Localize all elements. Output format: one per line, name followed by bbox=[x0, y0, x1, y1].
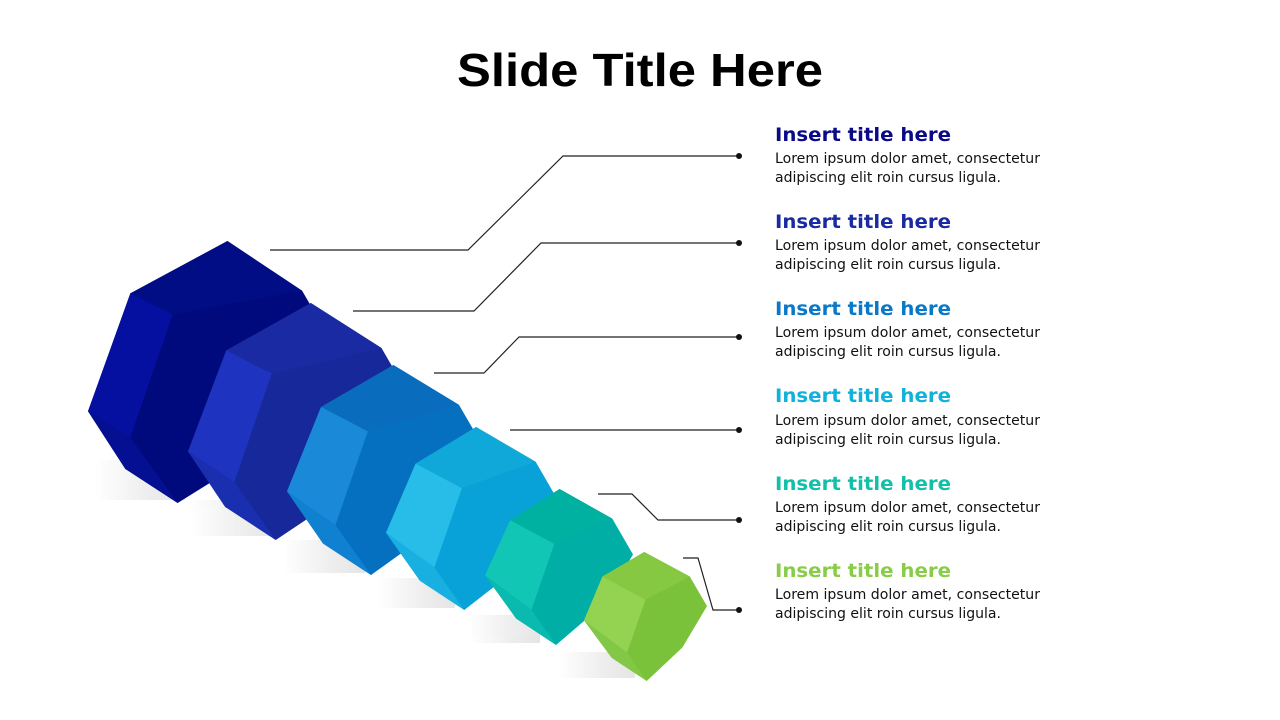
connector lines bbox=[270, 156, 739, 610]
text block 3: Insert title here bbox=[775, 298, 951, 320]
text block 4: Insert title here bbox=[775, 385, 951, 407]
text block 2: adipiscing elit roin cursus ligula. bbox=[775, 257, 1001, 273]
text block 6 bbox=[775, 560, 1040, 622]
title: Slide Title Here bbox=[457, 44, 823, 96]
hexagon prism 5 bbox=[485, 489, 633, 645]
text block 2: Insert title here bbox=[775, 211, 951, 233]
text block 5: adipiscing elit roin cursus ligula. bbox=[775, 519, 1001, 535]
text block 1: Lorem ipsum dolor amet, consectetur bbox=[775, 151, 1040, 167]
text block 1 bbox=[775, 124, 1040, 186]
hexagon prism 2 bbox=[188, 303, 413, 540]
text block 6: Lorem ipsum dolor amet, consectetur bbox=[775, 587, 1040, 603]
text block 2 bbox=[775, 211, 1040, 273]
text block 4: Lorem ipsum dolor amet, consectetur bbox=[775, 413, 1040, 429]
text block 3: Lorem ipsum dolor amet, consectetur bbox=[775, 325, 1040, 341]
connector dots bbox=[736, 153, 742, 613]
text block 2: Lorem ipsum dolor amet, consectetur bbox=[775, 238, 1040, 254]
hexagon prism 3 bbox=[287, 365, 487, 575]
text block 6: Insert title here bbox=[775, 560, 951, 582]
hexagon prism 6 bbox=[584, 552, 707, 681]
text block 3 bbox=[775, 298, 1040, 360]
hexagon prism 4 bbox=[386, 427, 560, 610]
shadows bbox=[95, 460, 635, 678]
text block 6: adipiscing elit roin cursus ligula. bbox=[775, 606, 1001, 622]
text block 5: Insert title here bbox=[775, 473, 951, 495]
text block 4: adipiscing elit roin cursus ligula. bbox=[775, 432, 1001, 448]
text block 5: Lorem ipsum dolor amet, consectetur bbox=[775, 500, 1040, 516]
text block 3: adipiscing elit roin cursus ligula. bbox=[775, 344, 1001, 360]
hexagon prism 1 bbox=[88, 241, 337, 503]
text block 5 bbox=[775, 473, 1040, 535]
text block 4 bbox=[775, 385, 1040, 448]
text block 1: Insert title here bbox=[775, 124, 951, 146]
text block 1: adipiscing elit roin cursus ligula. bbox=[775, 170, 1001, 186]
